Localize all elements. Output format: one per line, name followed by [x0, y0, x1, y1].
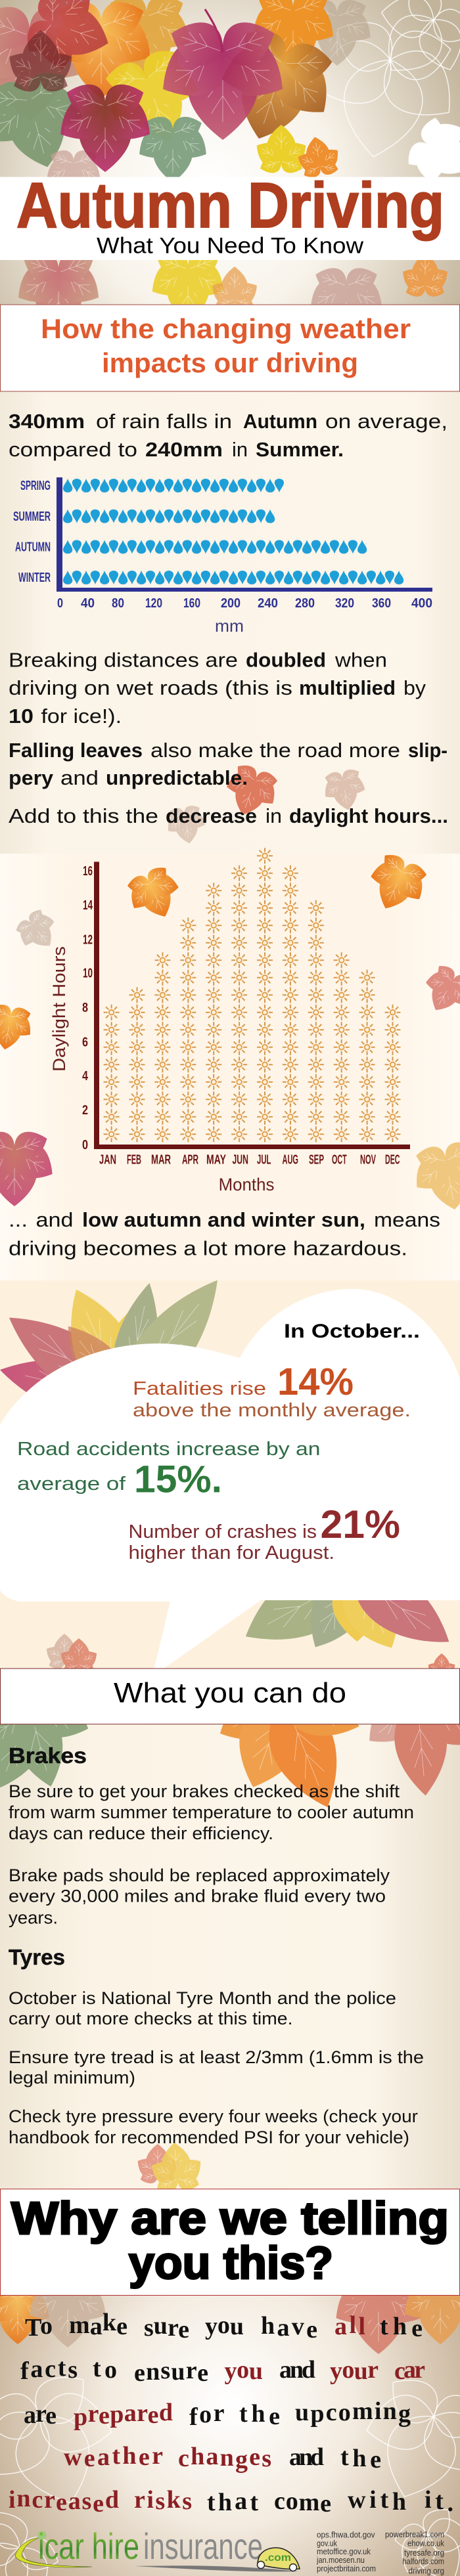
- text: rainfall: in: [232, 438, 248, 461]
- text: braking and leaves: Add to this the: [9, 804, 158, 827]
- x axis labels: mm: [215, 616, 244, 636]
- stat: crashes: 21%: [321, 1502, 400, 1546]
- x axis labels: 80: [112, 596, 124, 611]
- ransom note text: the: [239, 2400, 280, 2430]
- text: low sun: [9, 1208, 440, 1259]
- ransom note text: it.: [425, 2486, 453, 2517]
- text: rainfall: of rain falls in: [96, 410, 232, 433]
- ransom note text: prepared: [74, 2399, 173, 2431]
- ransom note text: and: [289, 2443, 324, 2471]
- y axis labels: 16: [83, 864, 93, 879]
- ransom note text: for: [189, 2399, 225, 2431]
- logo: car hire insurance: [15, 2525, 300, 2571]
- y axis labels: 4: [82, 1069, 89, 1083]
- text: rainfall: Autumn: [243, 410, 317, 433]
- ransom note text: the: [380, 2313, 423, 2342]
- text block: tyres: carry out more checks at this time.: [9, 2009, 293, 2028]
- heading box: weather: [0, 305, 460, 391]
- text: braking and leaves: doubled: [246, 649, 326, 672]
- ransom note text: all: [334, 2311, 365, 2340]
- advice leaves: [0, 1678, 460, 1819]
- x axis labels: 200: [221, 596, 241, 611]
- ransom note text: facts: [20, 2354, 78, 2385]
- month labels: DEC: [385, 1153, 400, 1168]
- x axis labels: 280: [295, 596, 315, 611]
- text: braking and leaves: Breaking distances are: [9, 649, 238, 672]
- month labels: MAR: [151, 1153, 171, 1168]
- closing leaves: [0, 2140, 460, 2576]
- text block: tyres: [9, 1945, 424, 2147]
- heading box: why are we telling you this: you this?: [129, 2237, 333, 2288]
- ransom note text: changes: [178, 2443, 271, 2474]
- x axis labels: 400: [411, 596, 432, 611]
- y axis labels: 8: [82, 1001, 88, 1015]
- y axis labels: 6: [82, 1035, 88, 1049]
- month labels: NOV: [360, 1153, 376, 1168]
- y axis labels: [49, 864, 93, 1152]
- sun columns: [99, 847, 405, 1143]
- text: rainfall: 340mm: [9, 410, 85, 433]
- source list: [316, 2529, 444, 2575]
- y axis labels: 12: [83, 933, 93, 948]
- ransom note text: weather: [64, 2442, 163, 2472]
- source list: tyresafe.org: [404, 2548, 444, 2558]
- ransom note text: increased: [9, 2485, 119, 2518]
- text: braking and leaves: 10: [9, 705, 34, 728]
- source list: driving.org: [409, 2566, 444, 2575]
- stat: road accidents: average of: [17, 1474, 126, 1495]
- ransom note text: come: [274, 2487, 331, 2518]
- text: braking and leaves: by: [403, 676, 426, 699]
- x axis labels: 120: [145, 596, 162, 611]
- ransom note text: risks: [134, 2486, 192, 2515]
- ransom note text: sure: [144, 2312, 189, 2344]
- x axis labels: 160: [183, 596, 200, 611]
- chart leaves: [0, 842, 460, 1217]
- text: rainfall: Summer.: [256, 438, 344, 461]
- text block: brakes: years.: [9, 1908, 58, 1928]
- stat: road accidents: [17, 1439, 321, 1501]
- stat: crashes: Number of crashes is: [129, 1521, 317, 1542]
- text: low sun: ...: [9, 1208, 28, 1231]
- month labels: MAY: [206, 1153, 226, 1168]
- source list: metoffice.gov.uk: [317, 2546, 371, 2556]
- text: braking and leaves: and: [60, 766, 99, 789]
- panel: in October speech bubble: [0, 1289, 460, 1676]
- y axis labels: Daylight Hours: [49, 946, 69, 1072]
- x axis labels: 0: [57, 596, 63, 611]
- text block: tyres: October is National Tyre Month and the police: [9, 1988, 396, 2008]
- season labels: WINTER: [18, 571, 51, 585]
- text: braking and leaves: slip-: [408, 739, 448, 762]
- text block: tyres: Check tyre pressure every four weeks (check your: [9, 2107, 418, 2126]
- text leaves: [160, 755, 373, 848]
- text: low sun: low autumn and winter sun,: [82, 1208, 365, 1231]
- text: braking and leaves: also make the road more: [150, 739, 400, 762]
- logo: car hire insurance: insurance: [143, 2525, 263, 2567]
- ransom note text: to: [93, 2355, 117, 2384]
- rainfall drops: [63, 479, 403, 584]
- ransom note text: [9, 2309, 453, 2518]
- x axis labels: 360: [372, 596, 391, 611]
- text block: brakes: days can reduce their efficiency.: [9, 1823, 273, 1843]
- ransom note text: make: [69, 2309, 127, 2340]
- heading box: why are we telling you this: [0, 2189, 460, 2296]
- ransom note text: that: [207, 2487, 258, 2516]
- season labels: SUMMER: [13, 510, 51, 524]
- stat: road accidents: 15%.: [134, 1458, 222, 1501]
- title band: [0, 169, 460, 260]
- month labels: OCT: [332, 1153, 347, 1168]
- source list: projectbritain.com: [317, 2564, 376, 2573]
- source list: halfords.com: [402, 2556, 444, 2566]
- ransom note text: are: [24, 2400, 57, 2430]
- x axis labels: [57, 596, 432, 636]
- month labels: JUN: [233, 1153, 248, 1168]
- text: braking and leaves: multiplied: [299, 676, 396, 699]
- text: braking and leaves: driving on wet roads (this is: [9, 676, 292, 699]
- stat: crashes: higher than for August.: [129, 1542, 334, 1563]
- heading box: why are we telling you this: Why are we telling: [11, 2193, 449, 2244]
- heading box: what you can do: What you can do: [114, 1678, 346, 1709]
- text: low sun: driving becomes a lot more hazardous.: [9, 1237, 407, 1259]
- ransom note text: upcoming: [295, 2397, 411, 2428]
- header leaves: [0, 0, 460, 338]
- ransom note text: car: [394, 2356, 425, 2385]
- stat heading: In October...: [284, 1321, 420, 1342]
- heading box: what you can do: [0, 1669, 460, 1724]
- text: braking and leaves: pery: [9, 766, 54, 789]
- ransom note text: and: [279, 2356, 315, 2384]
- text block: brakes: Be sure to get your brakes checked as the shift: [9, 1781, 400, 1801]
- text: braking and leaves: in: [265, 804, 282, 827]
- text: braking and leaves: when: [334, 649, 387, 672]
- stat: fatalities: [133, 1361, 411, 1421]
- ransom note text: have: [261, 2312, 317, 2344]
- x axis labels: 40: [81, 596, 95, 611]
- stat: crashes: [129, 1502, 400, 1563]
- text block: brakes: Brakes: [9, 1743, 87, 1768]
- month labels: SEP: [309, 1153, 324, 1168]
- text block: brakes: from warm summer temperature to cooler autumn: [9, 1802, 414, 1822]
- text: low sun: and: [35, 1208, 74, 1231]
- text: braking and leaves: Falling leaves: [9, 739, 143, 762]
- y axis labels: 0: [82, 1138, 88, 1152]
- ransom note text: your: [330, 2356, 379, 2385]
- month labels: JUL: [257, 1153, 271, 1168]
- y axis labels: 14: [83, 898, 93, 913]
- y axis labels: 10: [83, 967, 93, 981]
- logo: car hire insurance: icar hire: [38, 2525, 139, 2567]
- ransom note text: you: [225, 2356, 263, 2385]
- ransom note text: To: [25, 2312, 53, 2342]
- source list: powerbreak1.com: [385, 2529, 444, 2539]
- text block: tyres: legal minimum): [9, 2068, 135, 2087]
- month labels: Months: [219, 1175, 274, 1194]
- season labels: SPRING: [20, 479, 51, 493]
- text block: brakes: [9, 1743, 414, 1928]
- source list: ops.fhwa.dot.gov: [317, 2530, 375, 2540]
- text: braking and leaves: daylight hours...: [289, 804, 448, 827]
- month labels: FEB: [127, 1153, 141, 1168]
- ransom note text: with: [348, 2486, 406, 2516]
- text: low sun: means: [374, 1208, 440, 1231]
- text: braking and leaves: [9, 649, 448, 827]
- text: rainfall: [9, 410, 448, 461]
- text block: brakes: Brake pads should be replaced approximately: [9, 1866, 390, 1885]
- text: braking and leaves: decrease: [166, 804, 257, 827]
- stat: fatalities: 14%: [277, 1361, 354, 1403]
- ransom note text: the: [340, 2443, 381, 2474]
- ransom note text: you: [205, 2311, 244, 2340]
- season labels: [13, 479, 51, 585]
- source list: ehow.co.uk: [407, 2539, 444, 2548]
- text block: tyres: handbook for recommended PSI for your vehicle): [9, 2128, 409, 2147]
- text: braking and leaves: unpredictable.: [106, 766, 248, 789]
- icon: car: [258, 2548, 300, 2571]
- month labels: JAN: [99, 1153, 116, 1168]
- icon: car: .com: [265, 2552, 291, 2564]
- heading box: weather: impacts our driving: [102, 347, 358, 378]
- stat: road accidents: Road accidents increase by an: [17, 1439, 321, 1460]
- text: rainfall: on average,: [325, 410, 448, 433]
- month labels: AUG: [283, 1153, 298, 1168]
- text block: tyres: Ensure tyre tread is at least 2/3mm (1.6mm is the: [9, 2047, 424, 2067]
- source list: jan.moesen.nu: [316, 2555, 365, 2565]
- chart: daylight hours: [49, 847, 410, 1194]
- stat: fatalities: Fatalities rise: [133, 1378, 266, 1399]
- x axis labels: 320: [335, 596, 354, 611]
- x axis labels: 240: [258, 596, 278, 611]
- y axis labels: 2: [82, 1103, 88, 1118]
- text: braking and leaves: for ice!).: [41, 705, 122, 728]
- text block: brakes: every 30,000 miles and brake fluid every two: [9, 1886, 386, 1906]
- chart: rainfall by season: [13, 477, 432, 636]
- text: rainfall: compared to: [9, 438, 137, 461]
- source list: gov.uk: [317, 2539, 337, 2548]
- stat: fatalities: above the monthly average.: [133, 1400, 411, 1421]
- month labels: APR: [182, 1153, 198, 1168]
- text block: tyres: Tyres: [9, 1945, 65, 1969]
- speech bubble leaves: [0, 1264, 460, 1682]
- season labels: AUTUMN: [15, 540, 51, 554]
- subtitle: What You Need To Know: [97, 234, 363, 259]
- text: rainfall: 240mm: [145, 438, 223, 461]
- heading box: weather: How the changing weather: [41, 313, 411, 344]
- month labels: [99, 1153, 400, 1194]
- ransom note text: ensure: [134, 2357, 208, 2387]
